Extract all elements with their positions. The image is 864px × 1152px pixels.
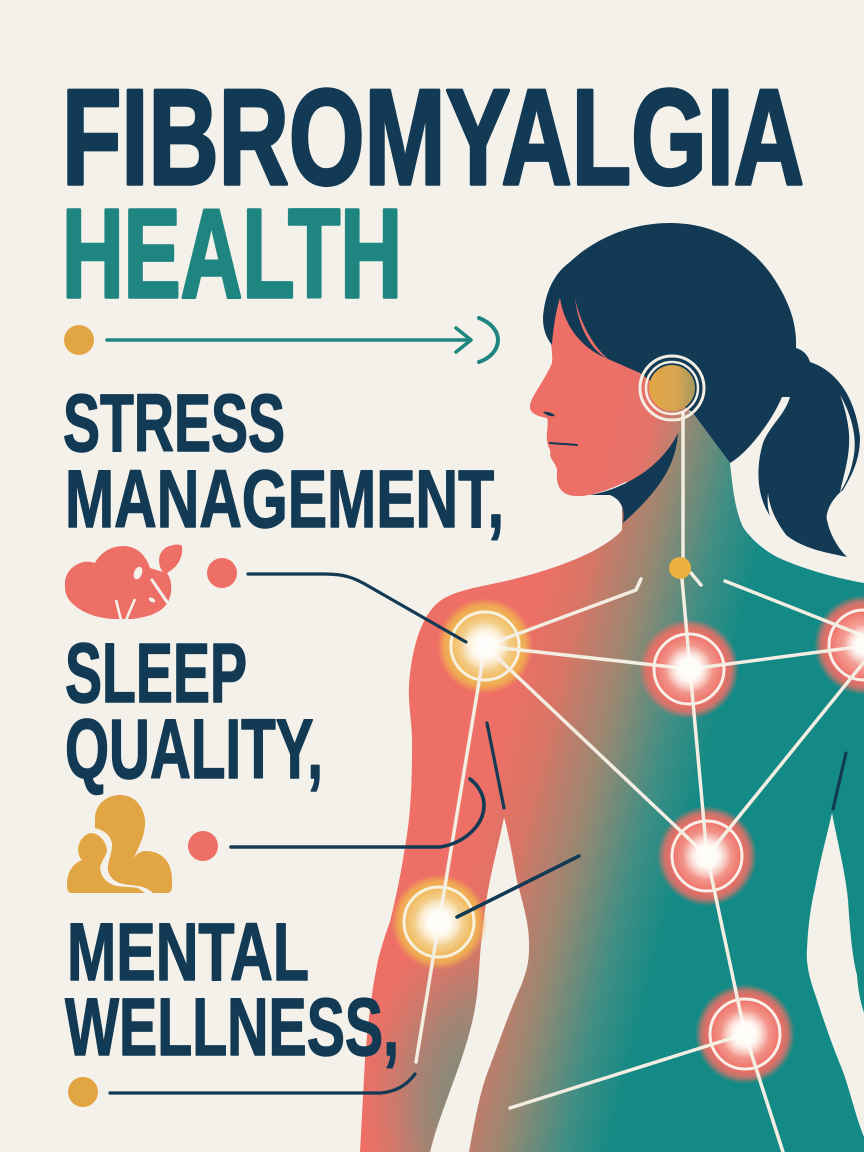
figure: face [530, 298, 695, 496]
text: mental wellness: WELLNESS, [65, 982, 399, 1073]
text: stress management: STRESS [63, 378, 285, 469]
icon: people in ochre [67, 795, 172, 893]
figure: hair [543, 223, 860, 557]
text: stress management [63, 378, 504, 545]
figure: woman's body [360, 400, 864, 1152]
title: HEALTH [62, 183, 402, 324]
title [62, 61, 804, 324]
navy connector lines [110, 574, 846, 1093]
connector dot: sleep [188, 831, 218, 861]
text: sleep quality: SLEEP [65, 626, 247, 720]
connector dot: mental [68, 1077, 98, 1107]
pain point white cores [415, 622, 864, 1058]
pain point glows [391, 595, 864, 1084]
text: mental wellness: MENTAL [67, 907, 309, 998]
icon: coral stress organ [65, 544, 182, 620]
text: sleep quality [65, 626, 323, 796]
text: stress management: MANAGEMENT, [65, 454, 504, 545]
figure: nose and mouth [543, 412, 577, 445]
text: sleep quality: QUALITY, [65, 702, 323, 796]
connector dot: stress [207, 558, 237, 588]
arrow divider [64, 318, 498, 362]
ear pain point [640, 356, 704, 420]
text: mental wellness [65, 907, 399, 1073]
neck dot [669, 557, 691, 579]
nerve network lines [416, 413, 864, 1152]
